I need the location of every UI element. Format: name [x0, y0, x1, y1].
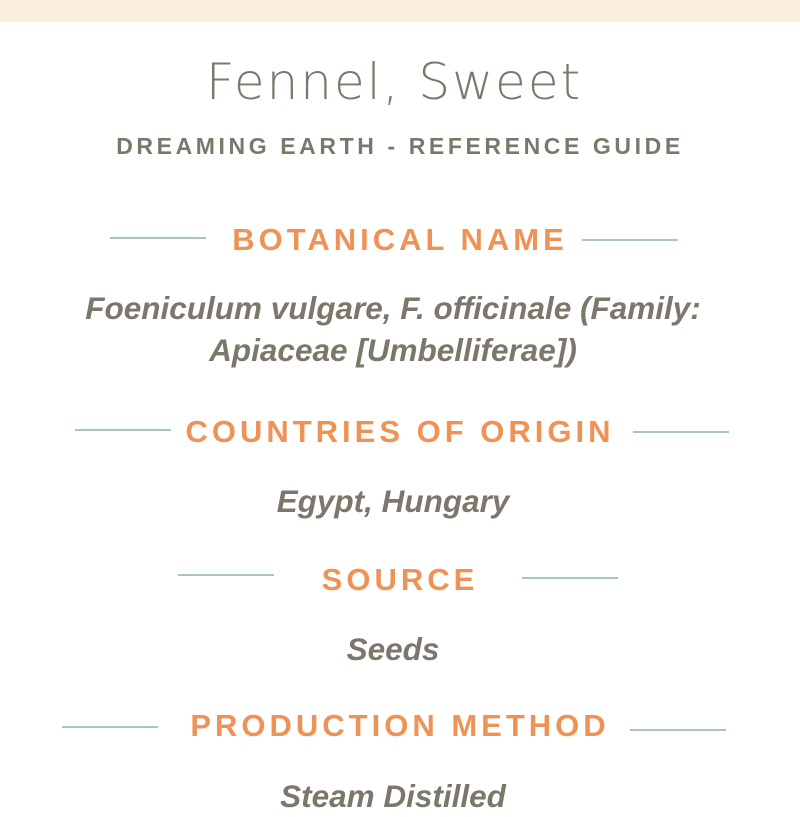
heading: production method: PRODUCTION METHOD: [190, 708, 610, 743]
top band: [0, 0, 800, 22]
heading: botanical name: BOTANICAL NAME: [232, 222, 568, 257]
heading: countries of origin: COUNTRIES OF ORIGIN: [185, 414, 615, 449]
text: botanical name: Foeniculum vulgare, F. officinale (Family:: [85, 290, 701, 326]
title: Fennel, Sweet: [206, 53, 582, 111]
text: botanical name: Apiaceae [Umbelliferae]): [209, 332, 577, 368]
text: production method: Steam Distilled: [280, 778, 506, 814]
heading: source: SOURCE: [322, 562, 478, 597]
text: botanical name: [85, 290, 701, 368]
text: source: Seeds: [347, 631, 439, 667]
text: countries: Egypt, Hungary: [277, 483, 509, 519]
subtitle: DREAMING EARTH - REFERENCE GUIDE: [116, 133, 684, 159]
